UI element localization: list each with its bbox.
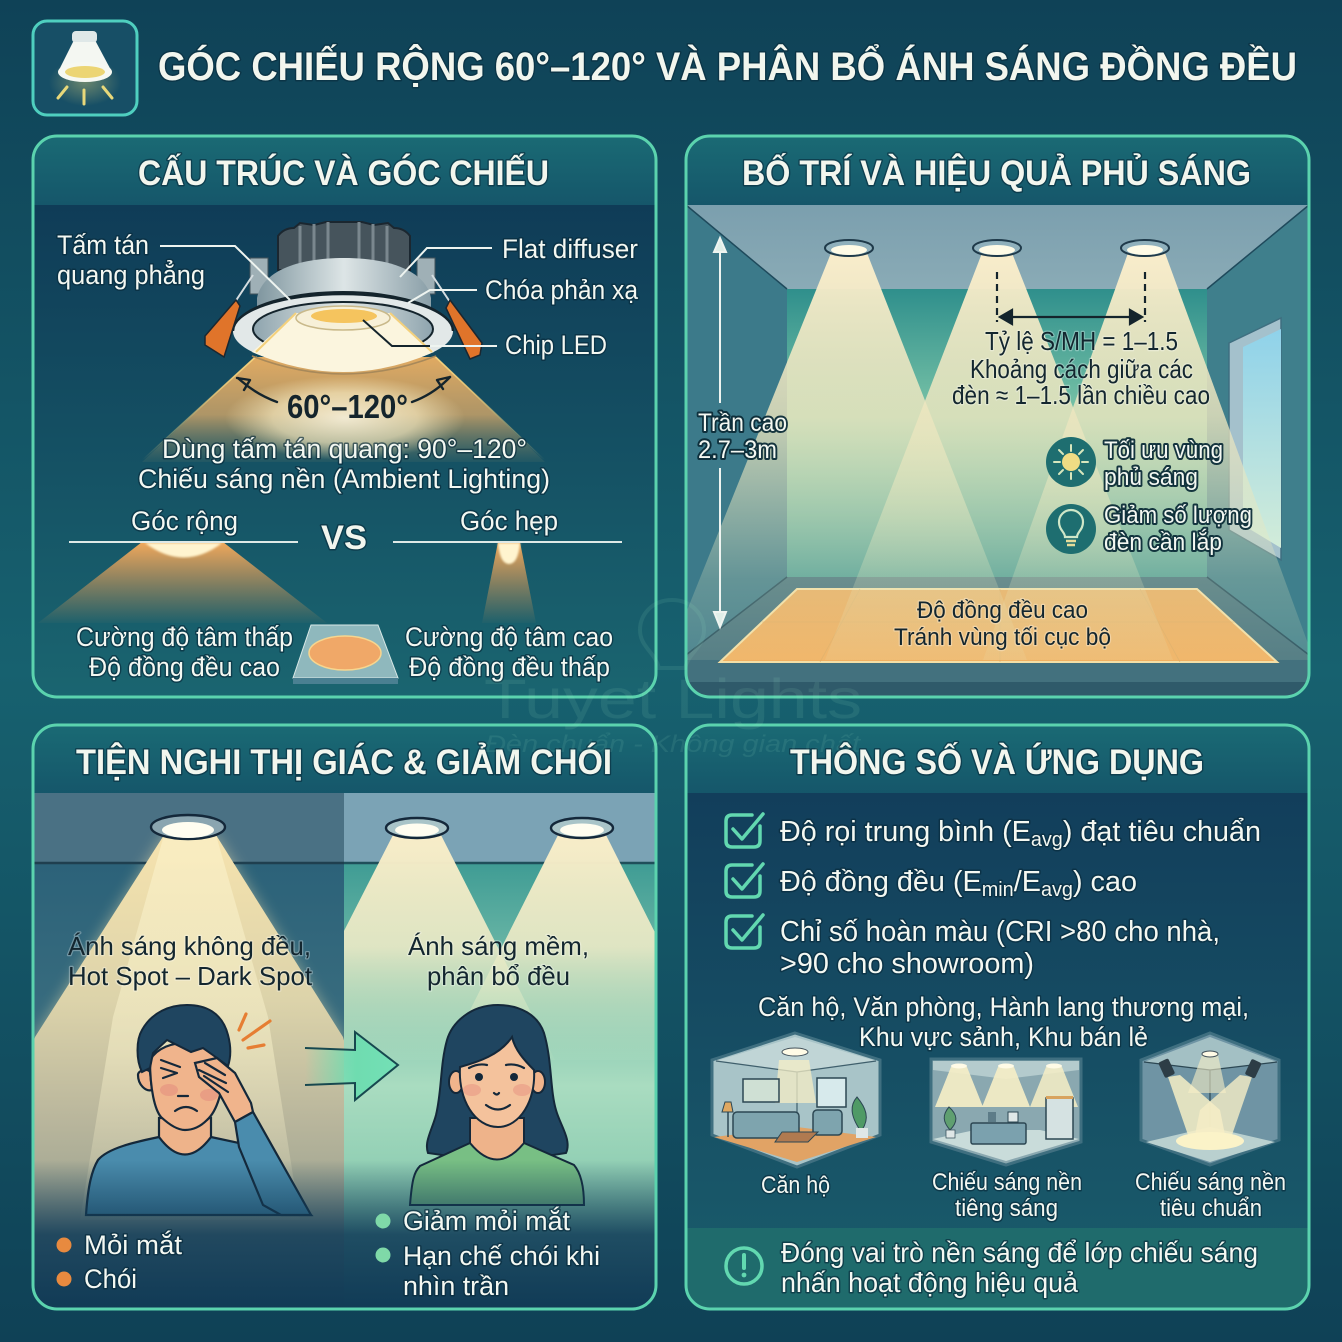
list: negative effects [56, 1229, 182, 1294]
text: uneven light: Hot Spot – Dark Spot [68, 961, 313, 991]
checklist: Độ đồng đều (E [780, 866, 983, 898]
callout band [686, 1228, 1309, 1309]
captions: tiêu chuẩn [1160, 1195, 1262, 1222]
label: chip LED [363, 320, 607, 360]
ceiling height arrow [714, 238, 726, 627]
checklist: avg [1031, 829, 1063, 851]
text: reduce fittings [1104, 502, 1252, 556]
text: floor uniformity: Độ đồng đều cao [917, 597, 1088, 624]
bottom fade [33, 1160, 656, 1309]
text: soft light: phân bổ đều [427, 961, 570, 991]
comparison: góc rộng [38, 506, 327, 623]
label: chóa phản xạ: Chóa phản xạ [485, 275, 639, 305]
panel: bố trí và hiệu quả phủ sáng [667, 136, 1314, 697]
text: wide beam traits: Cường độ tâm thấp [76, 622, 293, 652]
room interior [686, 205, 1309, 697]
text: soft light: Ánh sáng mềm, [408, 931, 589, 961]
text: narrow beam traits [405, 622, 613, 682]
left scene background [34, 793, 344, 1268]
comparison: góc hẹp [393, 506, 622, 623]
text: reduce fittings: Giảm số lượng [1104, 502, 1252, 529]
text: wide beam traits [76, 622, 293, 682]
text: uneven light: Ánh sáng không đều, [68, 931, 311, 961]
watermark: Đèn chuẩn - Không gian chất [485, 731, 862, 758]
panel: cấu trúc và góc chiếu [33, 136, 656, 697]
right scene background [344, 793, 654, 1268]
captions: Căn hộ [761, 1172, 830, 1199]
text: tấm tán quang note: Chiếu sáng nền (Ambient Lighting) [138, 464, 550, 494]
list: negative effects: Chói [84, 1264, 137, 1294]
text: S/MH ratio: Khoảng cách giữa các [970, 354, 1193, 384]
captions: tiêng sáng [955, 1195, 1058, 1222]
checklist: avg [1041, 879, 1073, 901]
text: narrow beam traits: Cường độ tâm cao [405, 622, 613, 652]
text: ceiling height: Trần cao [698, 409, 787, 437]
checklist: >90 cho showroom) [780, 948, 1034, 980]
text: narrow beam traits: Độ đồng đều thấp [409, 652, 610, 682]
text: floor uniformity [894, 597, 1111, 651]
panel: tiện nghi thị giác [32, 724, 658, 1310]
room: apartment [712, 1033, 880, 1167]
list: positive effects: Hạn chế chói khi [403, 1241, 600, 1271]
callout band: Đóng vai trò nền sáng để lớp chiếu sáng [781, 1237, 1258, 1268]
icon: floor light pool [293, 625, 398, 684]
checklist: /E [1014, 866, 1041, 898]
person: woman [410, 1005, 584, 1205]
callout band: nhấn hoạt động hiệu quả [781, 1267, 1078, 1298]
comparison: góc hẹp: Góc hẹp [460, 506, 558, 536]
angle value: 60°–120° [287, 388, 408, 425]
angle arrows [237, 377, 450, 402]
label: chip LED: Chip LED [505, 330, 607, 360]
text: S/MH ratio: Tỷ lệ S/MH = 1–1.5 [985, 326, 1178, 356]
captions: Chiếu sáng nền [932, 1169, 1082, 1196]
text: soft light [408, 931, 589, 991]
text: S/MH ratio: đèn ≈ 1–1.5 lần chiều cao [952, 380, 1210, 410]
comparison: góc rộng: Góc rộng [131, 506, 238, 536]
checklist: ) đạt tiêu chuẩn [1063, 816, 1261, 848]
header icon: downlight [33, 21, 137, 115]
text: ceiling height [698, 409, 787, 464]
captions [761, 1169, 1286, 1222]
checklist: Chỉ số hoàn màu (CRI >80 cho nhà, [780, 916, 1220, 948]
window [1229, 318, 1281, 560]
label: flat diffuser [400, 234, 638, 277]
checklist: Độ rọi trung bình (E [780, 816, 1033, 848]
label: tấm tán quang phẳng: Tấm tán [57, 230, 149, 260]
label: flat diffuser: Flat diffuser [502, 234, 638, 264]
list: positive effects [376, 1205, 600, 1301]
text: optimise coverage: phủ sáng [1104, 464, 1198, 491]
checklist: ) cao [1073, 866, 1137, 898]
text: tấm tán quang note [138, 434, 550, 494]
text: S/MH ratio [952, 326, 1210, 410]
panel: thông số và ứng dụng: THÔNG SỐ VÀ ỨNG DỤNG [790, 742, 1204, 782]
watermark: Tuyet Lights [484, 667, 862, 730]
label: chóa phản xạ [408, 275, 639, 305]
panel: cấu trúc và góc chiếu: CẤU TRÚC VÀ GÓC CHIẾU [138, 153, 549, 193]
ceiling lamps [825, 240, 1169, 256]
light beams [667, 253, 1314, 660]
main light beam [142, 357, 545, 462]
label: tấm tán quang phẳng [57, 230, 290, 300]
list: positive effects: nhìn trần [403, 1271, 509, 1301]
panel: tiện nghi thị giác: TIỆN NGHI THỊ GIÁC & GIẢM CHÓI [76, 742, 612, 782]
icon: sun [1046, 437, 1096, 487]
arrow: improvement [305, 1032, 398, 1100]
panel: thông số và ứng dụng [686, 725, 1309, 1309]
label: tấm tán quang phẳng: quang phẳng [57, 258, 205, 290]
list: positive effects: Giảm mỏi mắt [403, 1205, 570, 1236]
text: ceiling height: 2.7–3m [698, 436, 777, 464]
lamps [151, 815, 613, 839]
text: floor uniformity: Tránh vùng tối cục bộ [894, 624, 1111, 651]
downlight illustration [205, 222, 482, 374]
text: optimise coverage: Tối ưu vùng [1104, 437, 1223, 464]
room: retail [1141, 1033, 1279, 1165]
text: applications: Căn hộ, Văn phòng, Hành lang thương mại, [758, 992, 1249, 1022]
text: optimise coverage [1104, 437, 1223, 491]
person: man with glare [86, 1005, 311, 1215]
text: uneven light [68, 931, 313, 991]
icon: glare strokes [239, 1014, 270, 1048]
VS label: VS [321, 519, 367, 557]
text: applications: Khu vực sảnh, Khu bán lẻ [859, 1022, 1148, 1052]
text: wide beam traits: Độ đồng đều cao [89, 652, 280, 682]
watermark [484, 600, 862, 758]
text: tấm tán quang note: Dùng tấm tán quang: 90°–120° [162, 434, 527, 464]
panel: bố trí và hiệu quả phủ sáng: BỐ TRÍ VÀ HIỆU QUẢ PHỦ SÁNG [742, 153, 1251, 193]
spacing arrow [997, 272, 1145, 324]
checklist [726, 814, 1261, 980]
captions: Chiếu sáng nền [1135, 1169, 1286, 1196]
room: office [931, 1059, 1081, 1165]
list: negative effects: Mỏi mắt [84, 1229, 182, 1260]
text: applications [758, 992, 1249, 1052]
text: reduce fittings: đèn cần lắp [1104, 529, 1222, 556]
checklist: min [982, 879, 1014, 901]
icon: bulb [1046, 504, 1096, 554]
